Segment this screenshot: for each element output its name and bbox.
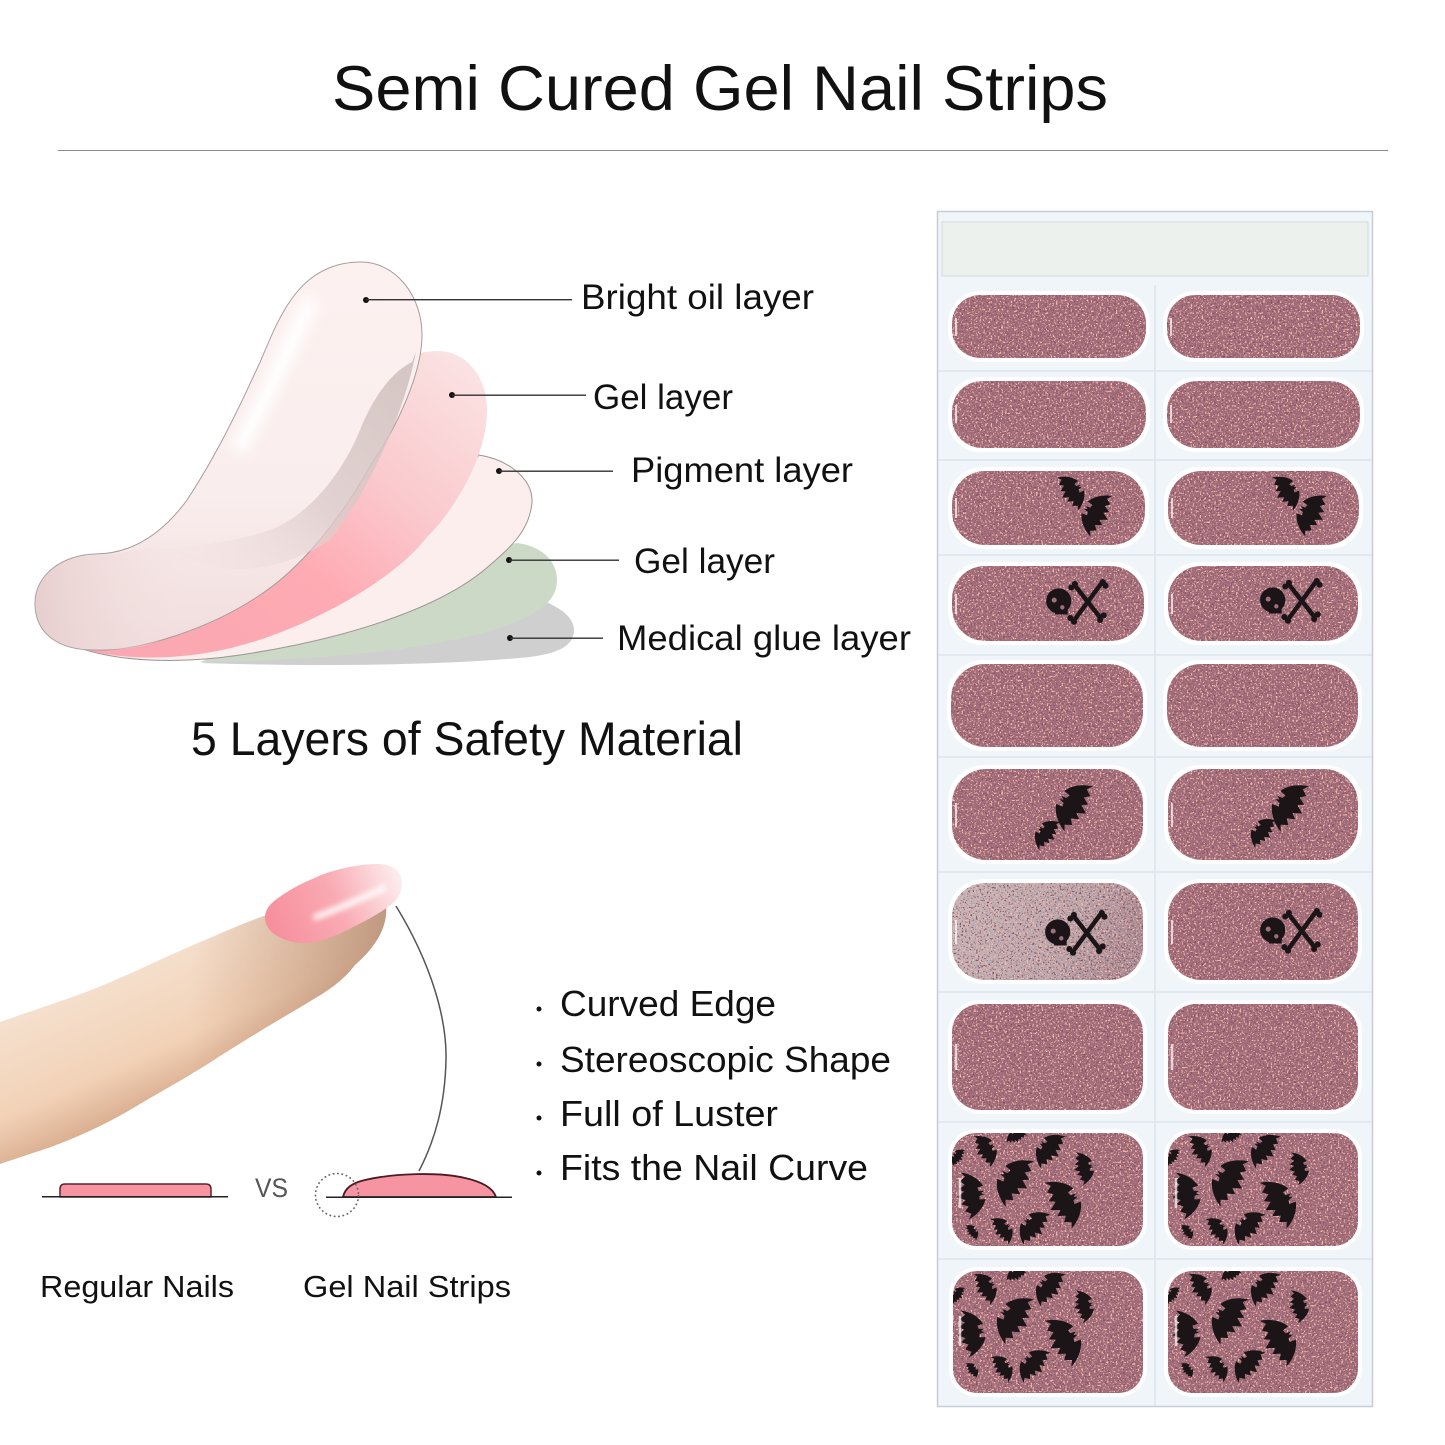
label: bright oil layer: Bright oil layer: [581, 278, 814, 317]
nail row 3 with bats: [948, 467, 1363, 549]
nail row 8: [948, 1000, 1362, 1114]
nail row 2: [948, 377, 1364, 452]
label: gel layer: [449, 378, 733, 417]
label: pigment layer: Pigment layer: [631, 451, 853, 490]
label: bright oil layer: [363, 278, 814, 317]
regular nail profile: [42, 1184, 228, 1198]
label: pigment layer: [496, 451, 853, 490]
subheading: 5 Layers of Safety Material: [191, 712, 743, 765]
caption: gel nail strips: Gel Nail Strips: [303, 1269, 511, 1304]
feature list: Curved Edge: [560, 983, 776, 1024]
nail highlight: [316, 888, 384, 917]
feature list: Stereoscopic Shape: [560, 1039, 891, 1080]
nail strip sheet: [938, 212, 1372, 1406]
layer: medical glue: [200, 602, 574, 665]
layer: green gel: [200, 543, 557, 662]
caption: regular nails: Regular Nails: [40, 1269, 234, 1304]
nail row 5: [947, 660, 1362, 751]
label: gel layer lower: [506, 542, 775, 581]
curve connector: [396, 906, 446, 1171]
title: Semi Cured Gel Nail Strips: [332, 54, 1108, 124]
gel strip profile: [316, 1174, 512, 1216]
feature list: Full of Luster: [560, 1093, 778, 1134]
label: medical glue layer: Medical glue layer: [617, 619, 911, 658]
layered nail diagram: [35, 262, 574, 665]
feature list: [536, 983, 891, 1188]
nail row 6 with bats: [948, 765, 1362, 864]
nail row 1: [948, 291, 1364, 362]
nail row 4 with skulls: [948, 562, 1362, 645]
VS: VS: [255, 1173, 288, 1203]
nail: [265, 864, 402, 943]
feature list: Fits the Nail Curve: [560, 1147, 868, 1188]
label: gel layer lower: Gel layer: [634, 542, 775, 581]
layer: pink gel: [60, 351, 487, 658]
layer: bright oil: [35, 262, 422, 650]
nail row 9 with bat pattern: [948, 1127, 1362, 1250]
label: medical glue layer: [507, 619, 911, 658]
top tab: [942, 222, 1368, 276]
label: gel layer: Gel layer: [593, 378, 733, 417]
finger with nail: [0, 864, 402, 1164]
layer: pigment: [80, 455, 532, 660]
sheet backing: [938, 212, 1372, 1406]
nail row 10 with bat pattern: [948, 1265, 1362, 1397]
nail row 7 with skulls: [948, 879, 1362, 984]
